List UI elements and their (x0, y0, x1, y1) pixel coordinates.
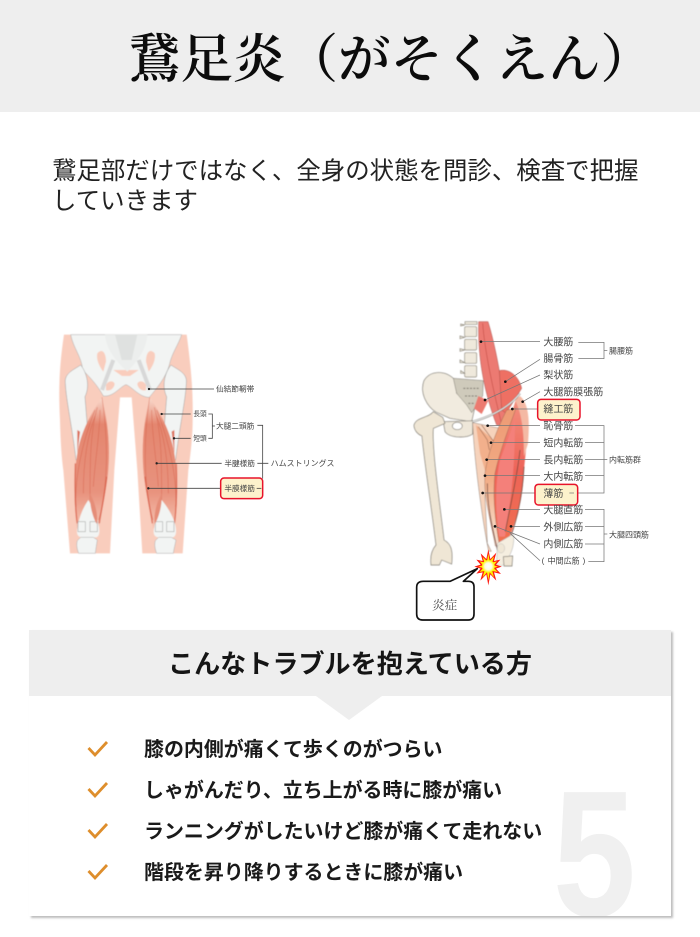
quadriceps (492, 397, 527, 543)
item 4: 階段を昇り降りするときに膝が痛い (144, 862, 463, 884)
muscle labels: 大腿筋膜張筋 (543, 386, 603, 399)
highlight: 半膜様筋 (221, 478, 263, 499)
iliacus muscle (499, 370, 522, 413)
muscle labels: 内側広筋 (543, 538, 583, 551)
muscle labels: ) (583, 556, 586, 565)
leader lines (148, 389, 268, 488)
hamstring labels: 短頭 (193, 434, 207, 443)
knee tendon (497, 534, 514, 566)
hamstring labels: 長頭 (193, 410, 207, 418)
panel heading: こんなトラブルを抱えている方 (168, 649, 532, 679)
intro text: 鵞足部だけではなく、全身の状態を問診、検査で把握 (52, 158, 638, 185)
figure: hamstrings (back of thighs) (59, 335, 335, 553)
psoas muscle (479, 322, 507, 425)
muscle labels: 大腿直筋 (543, 503, 583, 516)
muscle labels: 薄筋 (543, 487, 563, 500)
femur right (162, 365, 186, 460)
knee left (77, 500, 99, 537)
hamstring labels: 大腿二頭筋 (216, 421, 255, 431)
highlight: 薄筋 (535, 484, 578, 505)
muscle labels: ( (542, 556, 545, 565)
muscle labels: 梨状筋 (543, 369, 573, 382)
sacrum (453, 378, 483, 413)
hamstring muscles right (143, 397, 177, 528)
muscle dividing lines (487, 450, 524, 550)
title: 鵞足炎（がそくえん） (128, 31, 653, 89)
femur (414, 412, 452, 565)
piriformis (474, 396, 488, 414)
hamstring labels: ハムストリングス (271, 458, 335, 468)
icon: inflammation burst (474, 549, 502, 585)
adductor group (473, 423, 500, 551)
figure: front of thigh with inflammation (414, 322, 649, 620)
muscle labels: 外側広筋 (543, 520, 583, 533)
muscle labels: 内転筋群 (609, 455, 641, 465)
muscle labels: 腸腰筋 (609, 345, 633, 355)
panel heading (29, 630, 671, 696)
rectus femoris (496, 420, 515, 537)
muscle labels (542, 335, 649, 565)
muscle labels: 恥骨筋 (543, 419, 573, 432)
muscle labels: 腸骨筋 (543, 352, 573, 365)
muscle labels: 長内転筋 (543, 453, 583, 466)
panel: troubles (29, 630, 671, 916)
muscle labels: 大腿四頭筋 (609, 529, 649, 539)
femur left (65, 365, 90, 460)
intro text (52, 158, 638, 215)
heading pointer (316, 696, 382, 720)
item 3: ランニングがしたいけど膝が痛くて走れない (144, 821, 542, 843)
muscle labels: 短内転筋 (543, 436, 583, 449)
inner muscle tips (90, 493, 162, 524)
hamstring labels (193, 383, 335, 493)
hamstring labels: 半腱様筋 (224, 458, 255, 468)
item 1: 膝の内側が痛くて歩くのがつらい (144, 739, 442, 761)
pelvis (71, 335, 182, 397)
muscle labels: 大内転筋 (543, 470, 583, 483)
sartorius (485, 408, 516, 546)
callout: 炎症: 炎症 (432, 597, 458, 612)
knee right (154, 500, 176, 537)
spine (460, 322, 477, 377)
muscle labels: 大腰筋 (543, 335, 573, 348)
item 2: しゃがんだり、立ち上がる時に膝が痛い (144, 780, 502, 802)
muscle labels: 縫工筋 (543, 403, 573, 416)
pelvis openings (97, 351, 155, 391)
muscle labels: 中間広筋 (548, 555, 580, 565)
hamstring labels: 半膜様筋 (224, 483, 255, 493)
outer pale band (515, 396, 529, 457)
highlight: 縫工筋 (538, 399, 580, 420)
intro text: していきます (52, 188, 198, 215)
title banner (0, 0, 700, 112)
hamstring muscles left (75, 397, 109, 528)
ilium (423, 373, 475, 422)
pubic ring (443, 421, 473, 437)
muscle fibres (76, 397, 176, 520)
callout: 炎症 (417, 569, 477, 620)
leader lines (481, 342, 607, 562)
vastus medialis (486, 480, 499, 544)
inguinal ligament (473, 393, 520, 422)
sacrum (105, 335, 147, 372)
leg silhouette (59, 335, 193, 553)
hamstring labels: 仙結節靭帯 (216, 383, 255, 393)
